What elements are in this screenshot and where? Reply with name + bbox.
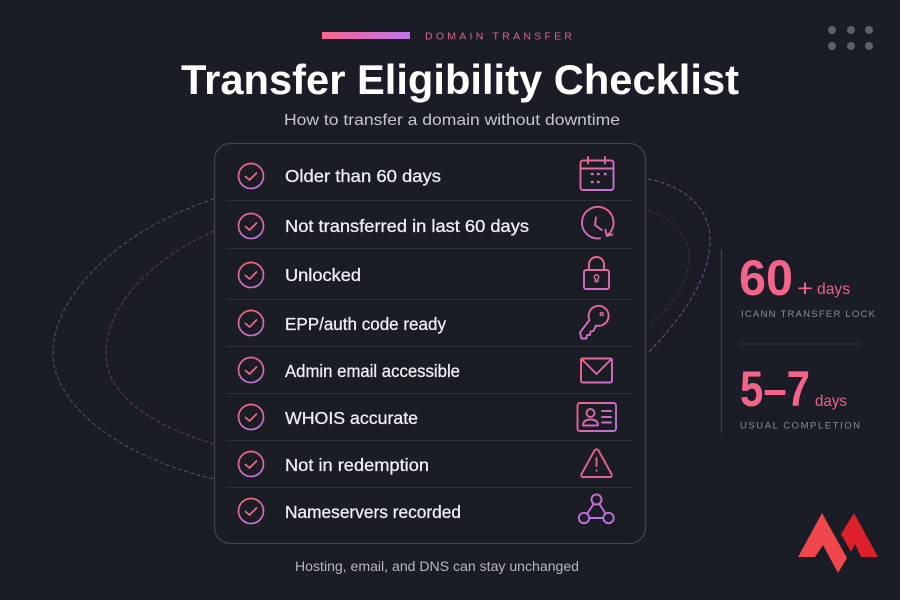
stat: 60+ days (739, 250, 876, 320)
row: unlocked: Unlocked (285, 265, 361, 285)
row: not in redemption: Not in redemption (285, 455, 429, 475)
stat: 5-7 days: 5–7 (740, 361, 810, 417)
footer note: Hosting, email, and DNS can stay unchanged (295, 559, 579, 574)
icon: id card (578, 403, 616, 431)
icon: clock with arrow (582, 207, 614, 238)
stat: 5-7 days: days (815, 393, 847, 410)
row: older than 60 days (238, 157, 614, 190)
row: nameservers recorded: Nameservers recorded (285, 502, 461, 522)
stats divider (720, 250, 722, 433)
eyebrow: accent bar and label (322, 30, 572, 42)
row: admin email (238, 358, 612, 382)
row: WHOIS accurate: WHOIS accurate (285, 408, 418, 428)
icon: envelope (581, 358, 612, 382)
row: not transferred (238, 207, 614, 238)
row: not transferred: Not transferred in last 60 days (285, 216, 529, 236)
title: Transfer Eligibility Checklist (181, 56, 739, 103)
panel: checklist (214, 144, 646, 544)
row: EPP/auth code: EPP/auth code ready (285, 314, 446, 334)
stat: 60+ days: days (817, 281, 850, 298)
icon: key (580, 306, 609, 338)
icon: network nodes (579, 494, 614, 523)
icon: padlock (584, 257, 609, 289)
subtitle: How to transfer a domain without downtime (284, 112, 620, 129)
stat: 5-7 days (740, 361, 860, 432)
icon: calendar (580, 157, 614, 190)
row: unlocked (238, 257, 609, 289)
row: older than 60 days: Older than 60 days (285, 166, 441, 186)
row: admin email: Admin email accessible (285, 361, 460, 381)
row: EPP/auth code (238, 306, 609, 338)
row: nameservers recorded (238, 494, 614, 524)
row: WHOIS accurate (238, 403, 616, 431)
stat: 60+ days: + (797, 275, 813, 301)
decorative orbit rings (53, 179, 710, 479)
stat: 60+ days: 60 (739, 250, 793, 306)
logo (798, 513, 878, 573)
eyebrow: accent bar and label: DOMAIN TRANSFER (425, 30, 572, 42)
stat: 5-7 days: USUAL COMPLETION (740, 420, 860, 432)
stat: 60+ days: ICANN TRANSFER LOCK (741, 309, 876, 320)
row: not in redemption (238, 449, 612, 477)
icon: warning triangle (581, 449, 612, 477)
decorative dot grid (828, 26, 873, 50)
